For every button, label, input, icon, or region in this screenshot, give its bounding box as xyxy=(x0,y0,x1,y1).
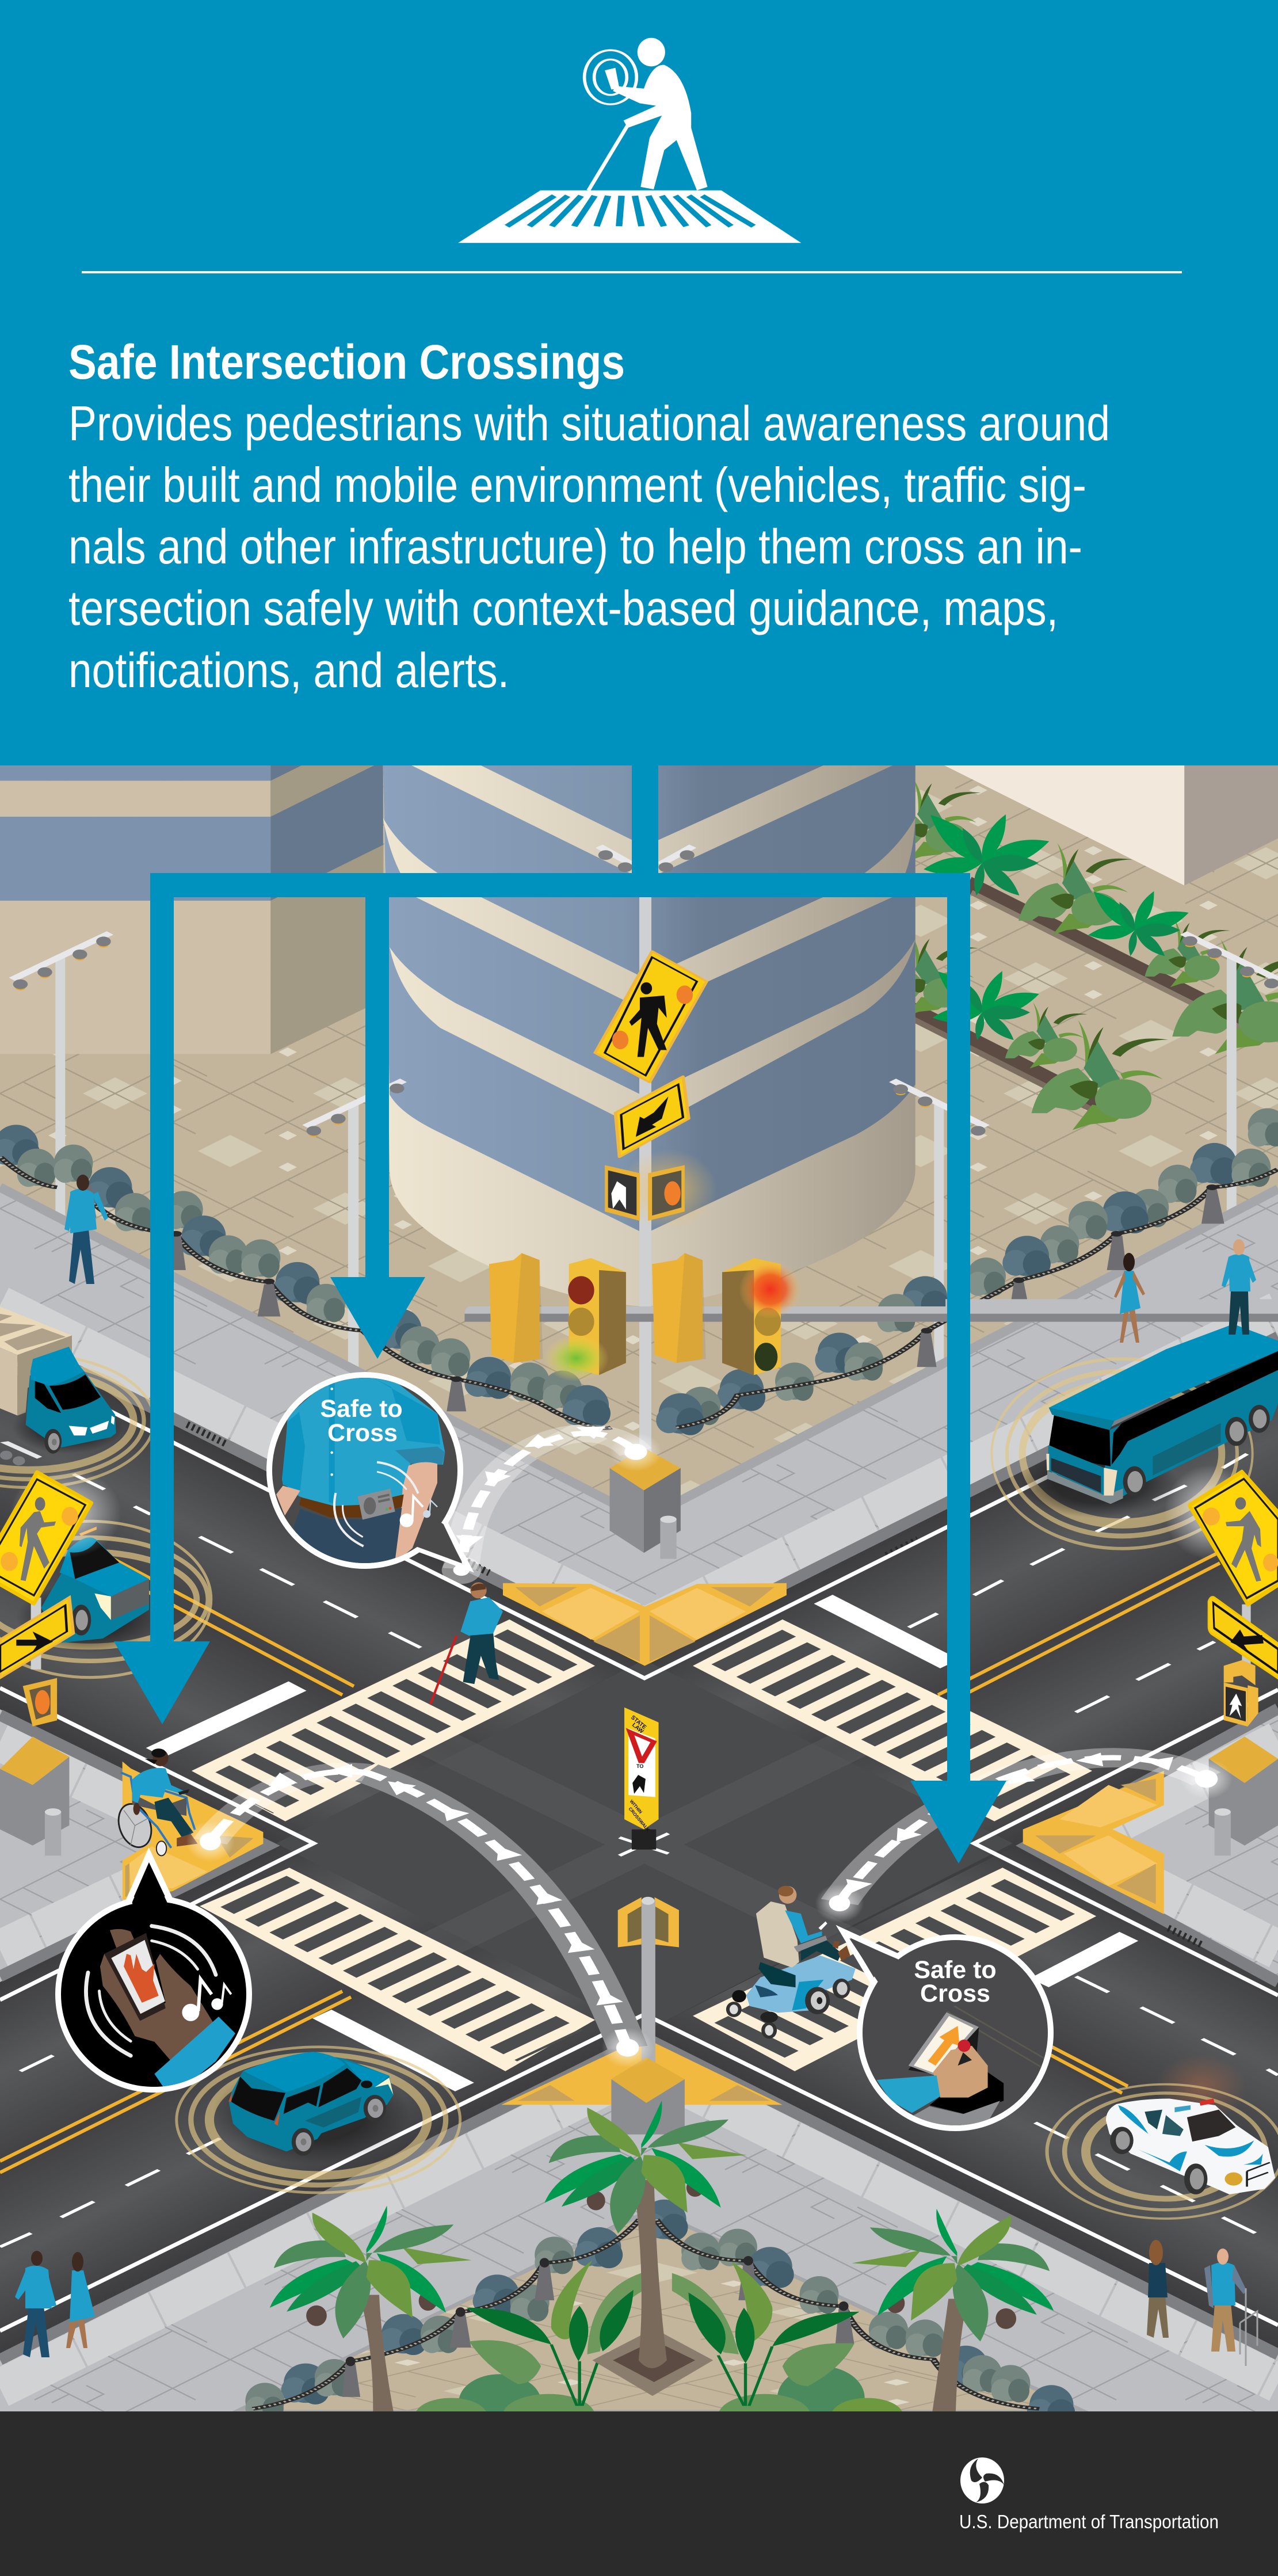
bottom bed planting and palm trees xyxy=(270,2101,1054,2437)
callout text xyxy=(914,1956,997,2007)
building: upper-right block xyxy=(944,765,1278,885)
lane dashes xyxy=(0,1454,1278,2247)
sign: diagonal arrow xyxy=(615,1076,689,1157)
callout text xyxy=(320,1395,403,1447)
crosswalks xyxy=(192,1619,1096,2071)
people: woman and older man with walker, lower right xyxy=(1147,2240,1257,2366)
divider rule xyxy=(82,271,1182,273)
description xyxy=(68,397,1110,698)
icon: pedestrian with cane and phone on crosswalk xyxy=(458,38,801,243)
guidance path: top pillar to pedestrian xyxy=(442,1421,662,1584)
bushes along upper plaza xyxy=(0,1108,1278,1435)
signal: right head with red xyxy=(722,1258,801,1375)
main signal pole xyxy=(639,765,651,1456)
person: wheelchair user xyxy=(113,1748,198,1855)
south median pole and signal back xyxy=(618,1897,679,2126)
arrow: trunk and crossbar xyxy=(150,765,970,897)
corner pillars and bollards xyxy=(0,1448,1278,1855)
building: upper-left block xyxy=(0,765,383,1054)
description: tersection safely with context-based guidance, maps, xyxy=(68,581,1058,636)
person: man walking upper left xyxy=(64,1175,108,1284)
median sign wording: CROSSWALK xyxy=(627,1807,651,1832)
panel: intersection illustration xyxy=(0,765,1278,2437)
sidewalks xyxy=(0,1187,1278,2411)
vehicle: police car xyxy=(1047,2055,1278,2219)
person: woman xyxy=(66,2252,95,2348)
person: man xyxy=(15,2251,56,2357)
traffic signal heads xyxy=(489,1253,801,1381)
pedestrian signal heads xyxy=(605,1149,718,1230)
chains and posts along upper plaza xyxy=(0,1157,1278,1428)
pad: right corner xyxy=(1023,1771,1164,1914)
palm: right xyxy=(852,2209,1054,2418)
vehicle: teal hatchback xyxy=(177,2047,460,2193)
bottom plaza bushes and chains xyxy=(245,2200,1075,2426)
arrow: right branch xyxy=(910,873,1006,1864)
callout text: Cross xyxy=(920,1980,990,2007)
median yield-to-pedestrians sign xyxy=(620,1708,669,1855)
department name: U.S. Department of Transportation xyxy=(959,2511,1219,2532)
pillar: top xyxy=(610,1448,681,1559)
double yellow centre lines xyxy=(0,1554,1220,2173)
pad: top corner xyxy=(503,1583,787,1666)
right signage cluster xyxy=(1164,1465,1278,1727)
guidance path: right pillar to scooter rider xyxy=(815,1752,1233,1923)
pad: left corner xyxy=(123,1762,263,1900)
footer bar xyxy=(0,2411,1278,2576)
pillar: left xyxy=(0,1736,69,1855)
pillar: bottom xyxy=(611,2057,685,2135)
crosswalk: south-west xyxy=(200,1868,595,2071)
signal mast arm xyxy=(464,1299,1278,1322)
palm: left xyxy=(270,2206,472,2418)
description: nals and other infrastructure) to help them cross an in- xyxy=(68,520,1082,574)
arrow: connector from header to three scenarios xyxy=(114,765,1006,1864)
vehicle: delivery truck xyxy=(0,1306,154,1488)
curbs and drains xyxy=(0,1332,1278,2360)
person: woman brown hair xyxy=(1147,2240,1169,2338)
median sign wording: TO xyxy=(636,1763,643,1769)
arrow: middle branch xyxy=(330,897,425,1359)
left signage cluster xyxy=(0,1468,121,1670)
plaza: bottom planting bed xyxy=(236,2209,1084,2411)
crosswalk: south-east xyxy=(693,1868,1096,2071)
icon: U.S. DOT triskelion logo xyxy=(960,2457,1004,2503)
crosswalk: north-east xyxy=(693,1619,1092,1822)
tactile pads xyxy=(503,1583,1164,1914)
person: older man with walker xyxy=(1204,2249,1257,2366)
description: their built and mobile environment (vehicles, traffic sig- xyxy=(68,458,1086,513)
callout: wearable device, safe to cross xyxy=(269,1375,468,1567)
guidance path: bottom pillar to wheelchair user xyxy=(186,1764,654,2068)
median sign wording: STATE xyxy=(630,1714,647,1731)
heading and description text xyxy=(68,335,1110,698)
plaza paving xyxy=(0,765,1278,1514)
pad: bottom corner xyxy=(501,2038,783,2105)
person: scooter rider xyxy=(726,1886,856,2038)
people: couple lower left xyxy=(15,2251,95,2357)
stop bars xyxy=(155,1599,1129,2087)
roads xyxy=(0,1337,1278,2354)
callout: push button, safe to cross xyxy=(843,1931,1053,2129)
planter box xyxy=(592,2329,713,2396)
callout: phone with stop alert and music tone xyxy=(58,1855,249,2090)
road edge lines xyxy=(0,1356,1278,2331)
left arrow sign and pedestrian signal xyxy=(0,1597,73,1727)
callout text: Safe to xyxy=(914,1956,997,1984)
header panel background xyxy=(0,0,1278,765)
sign: pedestrian crossing warning xyxy=(595,951,707,1083)
signal: left head with green xyxy=(544,1258,626,1381)
median sign wording: LAW xyxy=(631,1722,645,1735)
median sign wording xyxy=(627,1714,651,1832)
vehicle: blue car on left xyxy=(0,1521,211,1678)
palm: centre xyxy=(544,2101,746,2368)
vehicle: bus xyxy=(991,1324,1278,1549)
building: striped round tower xyxy=(383,765,915,1306)
description: Provides pedestrians with situational awareness around xyxy=(68,397,1110,451)
callout text: Safe to xyxy=(320,1395,403,1423)
crosswalk: north-west xyxy=(192,1619,595,1822)
callout text: Cross xyxy=(327,1419,398,1447)
tropical bed plants xyxy=(415,2260,903,2437)
person: man walking far right xyxy=(1222,1239,1256,1335)
description: notifications, and alerts. xyxy=(68,643,509,698)
arrow: left branch xyxy=(114,873,210,1724)
street lamps xyxy=(12,846,1278,1367)
pillar: right xyxy=(1209,1736,1278,1855)
signal: back plates xyxy=(489,1253,706,1363)
person: blind pedestrian with cane xyxy=(430,1582,503,1704)
median sign wording: WITHIN xyxy=(628,1799,643,1815)
title: Safe Intersection Crossings xyxy=(68,335,625,389)
person: woman walking upper right xyxy=(1114,1253,1145,1343)
planters with tropical plants xyxy=(876,778,1278,1130)
